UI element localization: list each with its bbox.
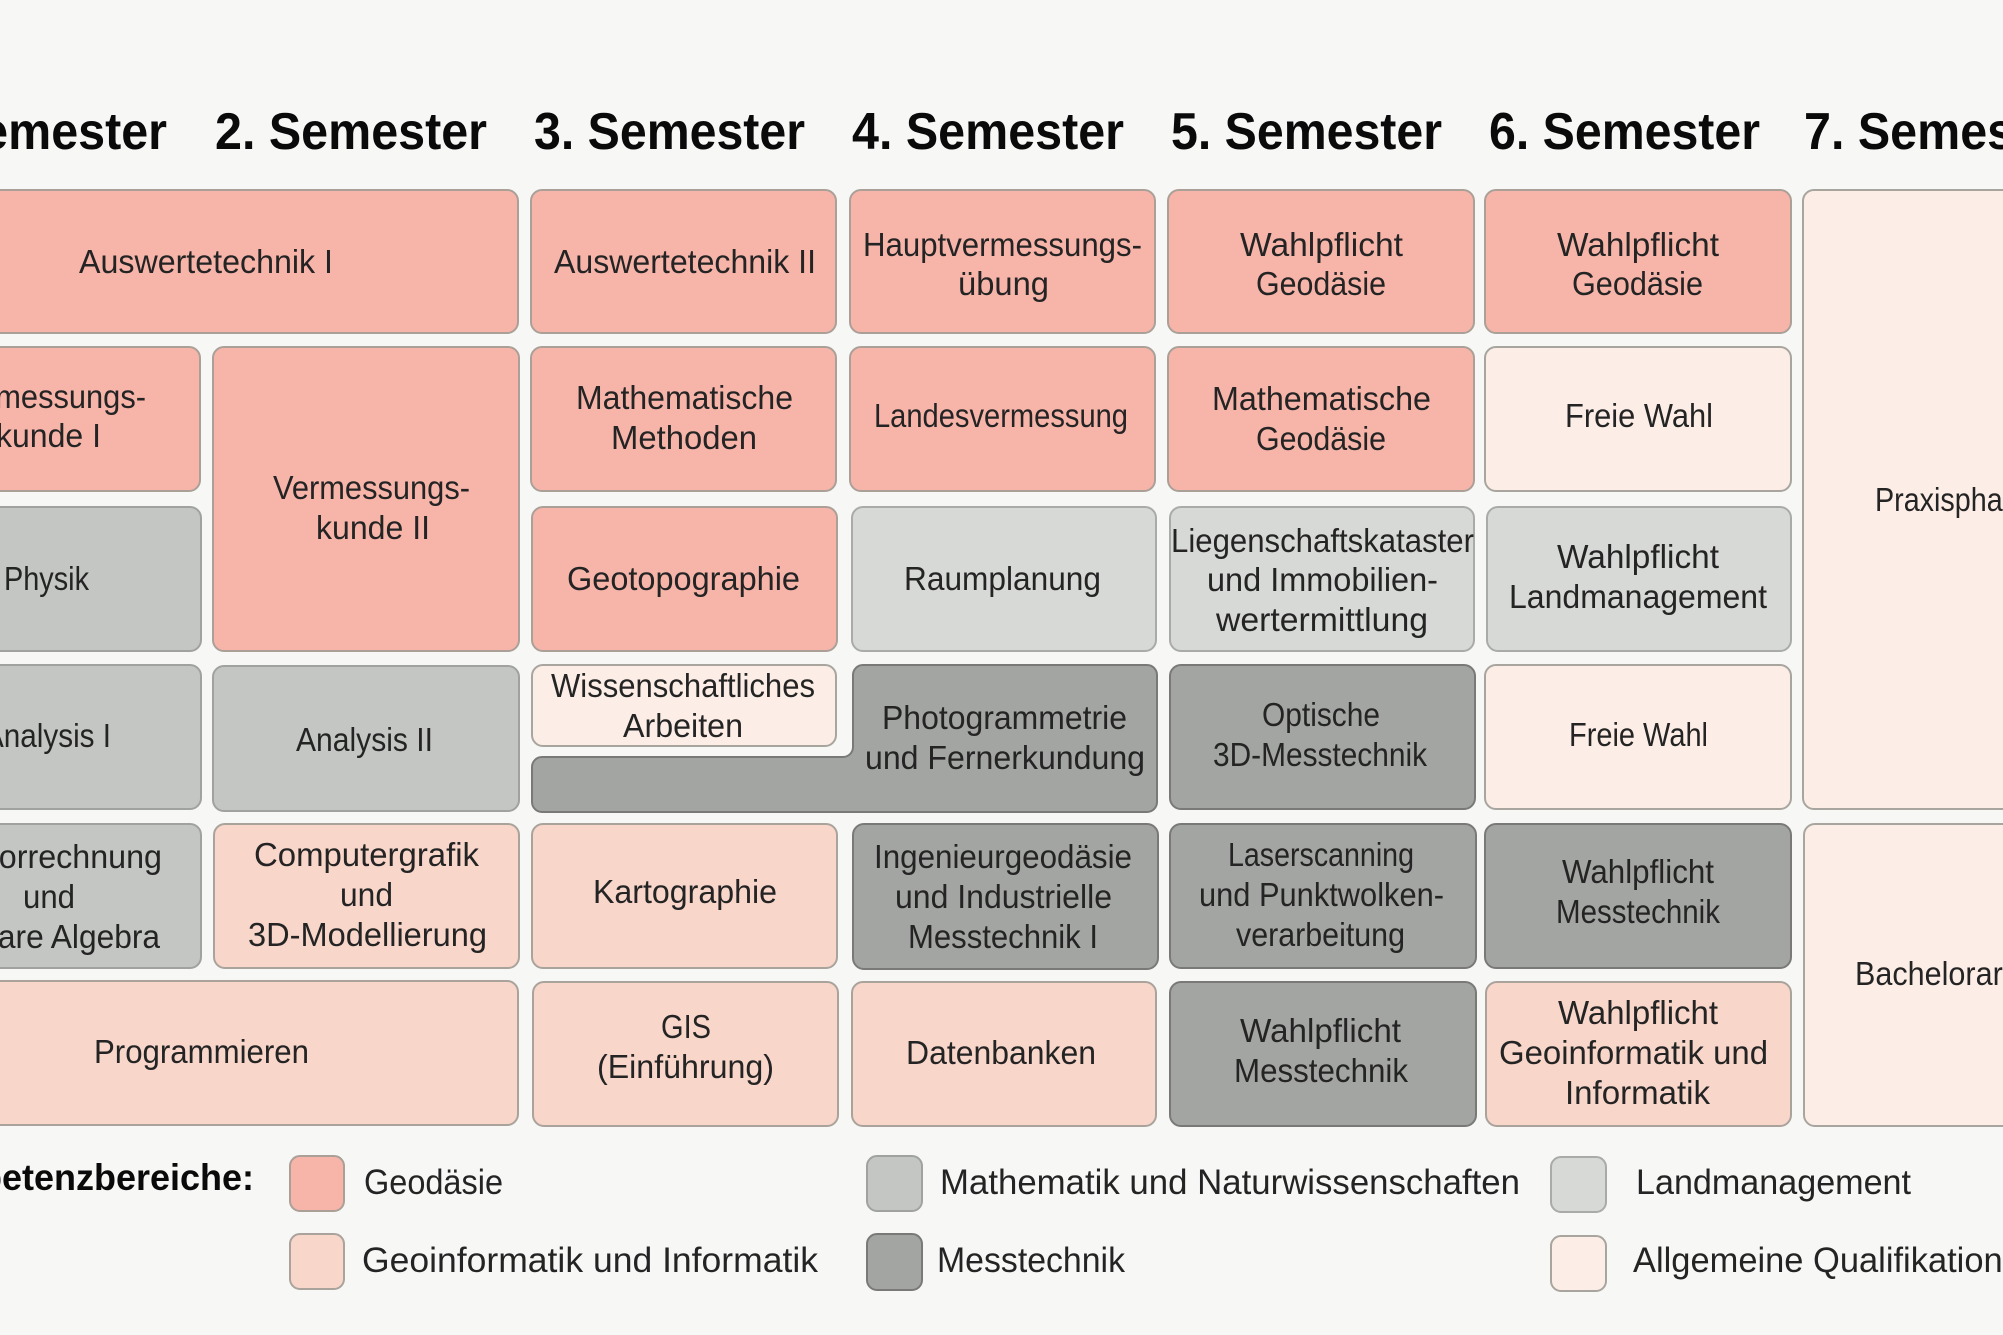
module: Wahlpflicht Geodäsie 6 xyxy=(1485,190,1791,333)
module: Ingenieurgeodäsie und Industrielle Messtechnik I: Messtechnik I xyxy=(908,918,1098,955)
module: Wahlpflicht Messtechnik 6 xyxy=(1485,824,1791,968)
module: Kartographie xyxy=(532,824,837,968)
module: Ingenieurgeodäsie und Industrielle Messtechnik I xyxy=(853,824,1158,969)
module: Ingenieurgeodäsie und Industrielle Messtechnik I: Ingenieurgeodäsie xyxy=(874,838,1132,875)
legend: Messtechnik: Messtechnik xyxy=(937,1241,1125,1280)
module: Mathematische Geodäsie: Geodäsie xyxy=(1256,420,1386,457)
semester headings: 2. Semester xyxy=(215,103,487,161)
module: Photogrammetrie und Fernerkundung: Photogrammetrie xyxy=(882,699,1127,736)
module: Analysis II: Analysis II xyxy=(296,721,433,758)
module: Wahlpflicht Messtechnik 6: Messtechnik xyxy=(1556,893,1720,930)
module: Optische 3D-Messtechnik: 3D-Messtechnik xyxy=(1213,736,1427,773)
semester headings: 3. Semester xyxy=(534,103,805,161)
semester headings: 6. Semester xyxy=(1489,103,1760,161)
module: Raumplanung: Raumplanung xyxy=(904,560,1101,597)
module: Hauptvermessungsübung xyxy=(850,190,1155,333)
module: Vektorrechnung und Lineare Algebra: und xyxy=(23,878,75,915)
legend: Geodäsie: Geodäsie xyxy=(364,1163,503,1202)
legend: Geoinformatik und Informatik: Geoinformatik und Informatik xyxy=(362,1241,818,1280)
legend: Landmanagement xyxy=(1551,1157,1911,1212)
module: Laserscanning und Punktwolkenverarbeitung xyxy=(1170,824,1476,968)
module: Geotopographie: Geotopographie xyxy=(567,560,800,597)
module: Datenbanken: Datenbanken xyxy=(906,1034,1096,1071)
module: Wahlpflicht Geodäsie 6: Geodäsie xyxy=(1572,265,1703,302)
module: Wahlpflicht Geodäsie 6: Wahlpflicht xyxy=(1557,226,1719,263)
module: Wahlpflicht Geodäsie 5: Wahlpflicht xyxy=(1240,226,1403,263)
module: Wahlpflicht Geodäsie 5: Geodäsie xyxy=(1256,265,1386,302)
legend: Messtechnik xyxy=(867,1234,1125,1290)
module: Computergrafik und 3D-Modellierung: 3D-Modellierung xyxy=(248,916,487,953)
module: Hauptvermessungsübung: übung xyxy=(958,265,1049,302)
module: Physik xyxy=(0,507,201,651)
module: Wissenschaftliches Arbeiten: Arbeiten xyxy=(623,707,743,744)
module: Auswertetechnik I xyxy=(0,190,518,333)
module: Programmieren xyxy=(0,981,518,1125)
module: Ingenieurgeodäsie und Industrielle Messtechnik I: und Industrielle xyxy=(895,878,1112,915)
module: Kartographie: Kartographie xyxy=(593,873,777,910)
module: Vermessungskunde II xyxy=(213,347,519,651)
semester headings xyxy=(0,103,2003,161)
module: Liegenschaftskataster: wertermittlung xyxy=(1215,601,1428,638)
legend: Allgemeine Qualifikationen xyxy=(1551,1236,2003,1291)
module: Auswertetechnik II: Auswertetechnik II xyxy=(554,243,816,280)
module: GIS Einführung xyxy=(533,982,838,1126)
module: Physik: Physik xyxy=(4,560,89,597)
module: Mathematische Geodäsie xyxy=(1168,347,1474,491)
module: Analysis I xyxy=(0,665,201,809)
module: Computergrafik und 3D-Modellierung: Computergrafik xyxy=(254,836,479,873)
module: Freie Wahl 6a: Freie Wahl xyxy=(1565,397,1713,434)
module: Wahlpflicht Geoinformatik und Informatik: Wahlpflicht xyxy=(1558,994,1718,1031)
module: Hauptvermessungsübung: Hauptvermessungs- xyxy=(863,226,1142,263)
module: Wahlpflicht Landmanagement xyxy=(1487,507,1791,651)
module: Auswertetechnik II xyxy=(531,190,836,333)
module: Vermessungskunde II: kunde II xyxy=(316,509,430,546)
module: Freie Wahl 6a xyxy=(1485,347,1791,491)
module: Wahlpflicht Messtechnik 5 xyxy=(1170,982,1476,1126)
module: Vektorrechnung und Lineare Algebra xyxy=(0,824,201,968)
module: Wahlpflicht Geoinformatik und Informatik: Geoinformatik und xyxy=(1499,1034,1768,1071)
semester headings: 5. Semester xyxy=(1171,103,1442,161)
module: Laserscanning und Punktwolkenverarbeitung: und Punktwolken- xyxy=(1199,876,1444,913)
module: Optische 3D-Messtechnik xyxy=(1170,665,1475,809)
module: Liegenschaftskataster: und Immobilien- xyxy=(1207,561,1438,598)
module: Wahlpflicht Messtechnik 6: Wahlpflicht xyxy=(1562,853,1714,890)
module: Landesvermessung xyxy=(850,347,1155,491)
module: Freie Wahl 6b xyxy=(1485,665,1791,809)
legend: Mathematik und Naturwissenschaften: Mathematik und Naturwissenschaften xyxy=(940,1163,1520,1202)
module: Computergrafik und 3D-Modellierung xyxy=(214,824,519,968)
module: Wahlpflicht Geodäsie 5 xyxy=(1168,190,1474,333)
module: Laserscanning und Punktwolkenverarbeitung: verarbeitung xyxy=(1236,916,1405,953)
module: Vermessungskunde II: Vermessungs- xyxy=(273,469,470,506)
module: Wahlpflicht Messtechnik 5: Wahlpflicht xyxy=(1240,1012,1401,1049)
module: Datenbanken xyxy=(852,982,1156,1126)
module: Wahlpflicht Geoinformatik und Informatik xyxy=(1486,982,1791,1126)
module: Vermessungskunde I xyxy=(0,347,200,491)
module: Landesvermessung: Landesvermessung xyxy=(874,397,1128,434)
module: Mathematische Methoden: Methoden xyxy=(611,419,757,456)
module: Liegenschaftskataster: Liegenschaftskataster xyxy=(1171,522,1474,559)
module: Photogrammetrie und Fernerkundung: und Fernerkundung xyxy=(865,739,1145,776)
module: Laserscanning und Punktwolkenverarbeitung: Laserscanning xyxy=(1228,836,1414,873)
legend: Mathematik und Naturwissenschaften xyxy=(867,1156,1520,1211)
module: Mathematische Geodäsie: Mathematische xyxy=(1212,380,1431,417)
module: Praxisphase xyxy=(1803,190,2003,809)
module: Wahlpflicht Geoinformatik und Informatik: Informatik xyxy=(1565,1074,1710,1111)
legend: Geoinformatik und Informatik xyxy=(290,1234,818,1289)
module: Analysis II xyxy=(213,666,519,811)
semester headings: 4. Semester xyxy=(852,103,1124,161)
module: Wissenschaftliches Arbeiten: Wissenschaftliches xyxy=(551,667,815,704)
module: Programmieren: Programmieren xyxy=(94,1033,309,1070)
module: Auswertetechnik I: Auswertetechnik I xyxy=(79,243,333,280)
module: Freie Wahl 6b: Freie Wahl xyxy=(1569,716,1708,753)
module: Computergrafik und 3D-Modellierung: und xyxy=(340,876,393,913)
module: Optische 3D-Messtechnik: Optische xyxy=(1262,696,1380,733)
module: Wahlpflicht Landmanagement: Landmanagement xyxy=(1509,578,1767,615)
module: Wahlpflicht Messtechnik 5: Messtechnik xyxy=(1234,1052,1408,1089)
module: Wissenschaftliches Arbeiten xyxy=(532,665,836,746)
module: Raumplanung xyxy=(852,507,1156,651)
module: Bachelorarbeit xyxy=(1804,824,2003,1126)
module: GIS Einführung: (Einführung) xyxy=(597,1048,774,1085)
module: Wahlpflicht Landmanagement: Wahlpflicht xyxy=(1557,538,1719,575)
module: Mathematische Methoden: Mathematische xyxy=(576,379,793,416)
module: Mathematische Methoden xyxy=(531,347,836,491)
module: GIS Einführung: GIS xyxy=(661,1008,711,1045)
module: Liegenschaftskataster xyxy=(1170,507,1474,651)
module: Geotopographie xyxy=(532,507,837,651)
legend: Landmanagement: Landmanagement xyxy=(1636,1163,1911,1202)
module: Photogrammetrie und Fernerkundung xyxy=(532,665,1157,812)
legend: Geodäsie xyxy=(290,1156,503,1211)
